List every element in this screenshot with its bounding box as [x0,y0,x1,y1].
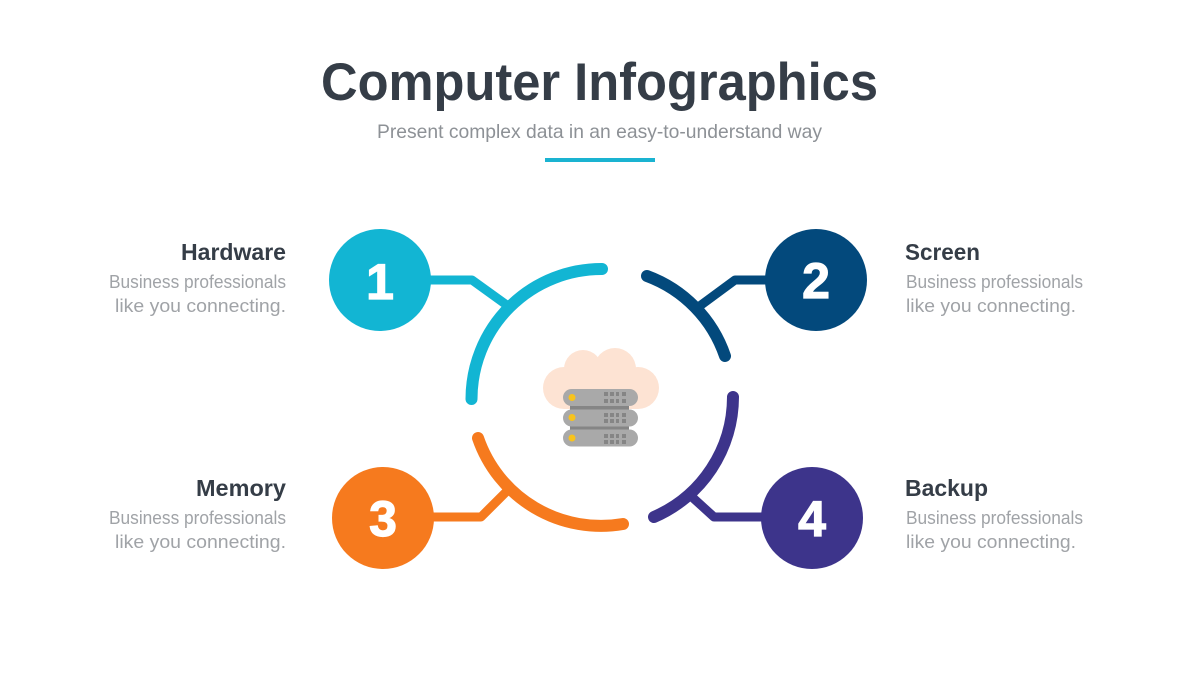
title underline [545,158,655,162]
subtitle: Present complex data in an easy-to-understand way [377,121,822,143]
item 2: screen text: Screen [905,239,980,265]
node 2: navy arc, connector and numbered circle [647,229,867,356]
item 1: hardware text: Hardware [181,239,286,265]
icon: cloud server [543,348,659,446]
item 1: hardware text: Business professionals [109,271,286,292]
item 3: memory text: like you connecting. [115,531,286,552]
item 4: backup text: Business professionals [906,507,1083,528]
node 2: navy arc, connector and numbered circle: 2 [802,253,830,309]
title: Computer Infographics [321,53,878,112]
item 4: backup text: like you connecting. [906,531,1076,552]
item 4: backup text: Backup [905,475,988,501]
icon: cloud [543,348,659,409]
node 3: orange arc, connector and numbered circle: 3 [369,491,397,547]
item 2: screen text: Business professionals [906,271,1083,292]
item 1: hardware text [109,239,286,316]
node 3: orange arc, connector and numbered circle [332,438,623,569]
node 4: indigo arc, connector and numbered circle [654,397,863,569]
icon: server stack [563,389,638,446]
item 3: memory text [109,475,286,552]
node 4: indigo arc, connector and numbered circle: 4 [798,491,826,547]
node 1: teal arc, connector and numbered circle: 1 [366,254,394,310]
item 1: hardware text: like you connecting. [115,295,286,316]
item 2: screen text: like you connecting. [906,295,1076,316]
item 2: screen text [905,239,1083,316]
item 4: backup text [905,475,1083,552]
item 3: memory text: Business professionals [109,507,286,528]
node 1: teal arc, connector and numbered circle [329,229,602,399]
item 3: memory text: Memory [196,475,286,501]
